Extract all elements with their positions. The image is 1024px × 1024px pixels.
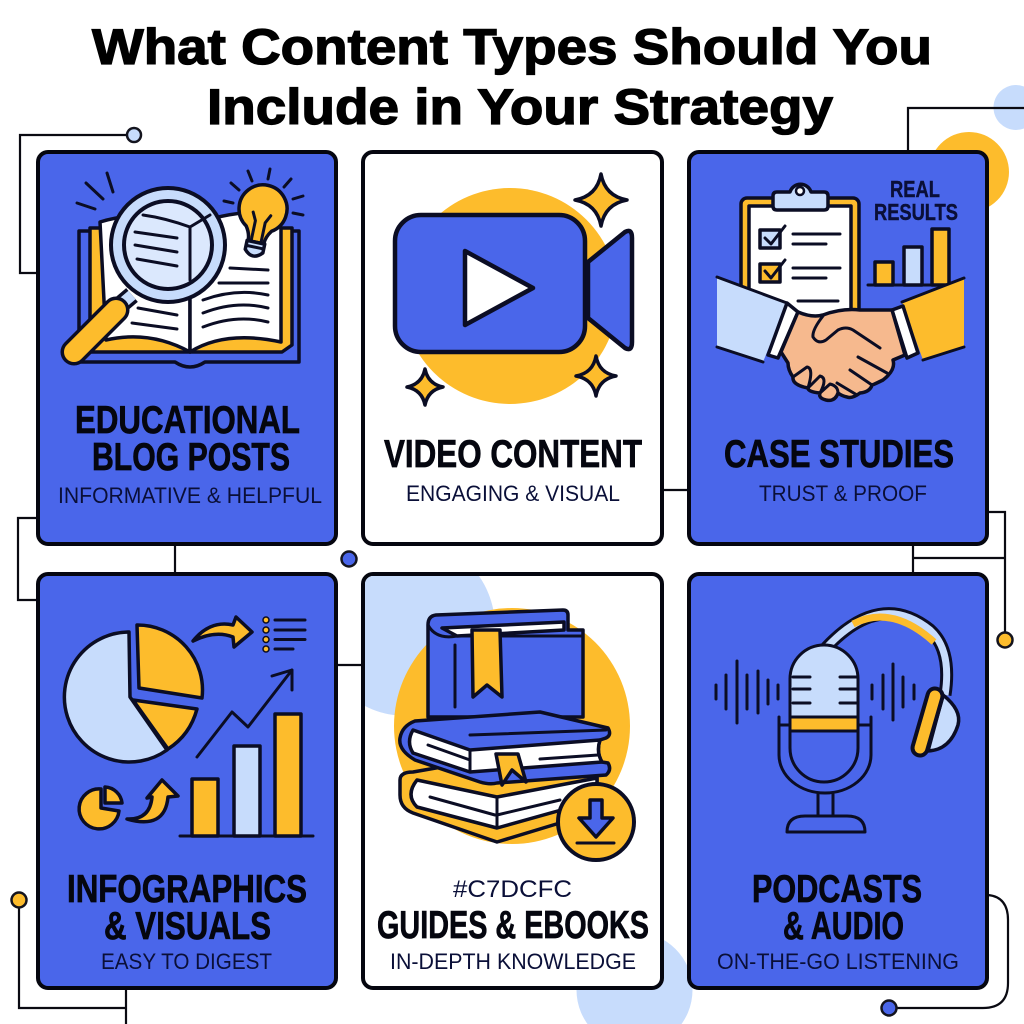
heading: EDUCATIONAL (75, 399, 300, 442)
heading: & AUDIO (783, 905, 904, 948)
icon: microphone and headphones (716, 614, 959, 832)
real results text: RESULTS (874, 199, 958, 225)
heading: PODCASTS (752, 868, 922, 911)
color code text: #C7DCFC (453, 876, 572, 903)
title: Include in Your Strategy (207, 79, 833, 135)
panel: guides and ebooks (361, 572, 664, 990)
subtitle: ON-THE-GO LISTENING (717, 949, 959, 974)
heading: VIDEO CONTENT (384, 433, 642, 476)
icon: charts and arrows (64, 617, 313, 836)
subtitle: INFORMATIVE & HELPFUL (58, 483, 322, 508)
panel: podcasts and audio (689, 574, 987, 988)
heading (67, 868, 307, 948)
subtitle: IN-DEPTH KNOWLEDGE (390, 949, 636, 974)
icon: video camera (395, 174, 632, 405)
icon: clipboard and handshake (717, 176, 964, 400)
panel: infographics and visuals (38, 574, 336, 988)
subtitle: EASY TO DIGEST (101, 949, 272, 974)
panel: video content (363, 152, 662, 544)
heading: GUIDES & EBOOKS (377, 904, 649, 947)
heading: INFOGRAPHICS (67, 868, 307, 911)
subtitle: TRUST & PROOF (759, 481, 927, 506)
heading: BLOG POSTS (92, 436, 290, 479)
panel: case studies (689, 152, 987, 544)
real results text: REAL (890, 176, 940, 202)
panel: educational blog posts (38, 152, 336, 544)
title: What Content Types Should You (92, 19, 932, 75)
heading: & VISUALS (104, 905, 271, 948)
title (92, 19, 932, 135)
heading: CASE STUDIES (724, 433, 954, 476)
icon: stack of books with download badge (394, 608, 634, 860)
subtitle: ENGAGING & VISUAL (406, 481, 620, 506)
real results text (874, 176, 958, 225)
heading (752, 868, 922, 948)
heading (75, 399, 300, 479)
icon: open book with magnifier and light bulb (74, 169, 303, 367)
